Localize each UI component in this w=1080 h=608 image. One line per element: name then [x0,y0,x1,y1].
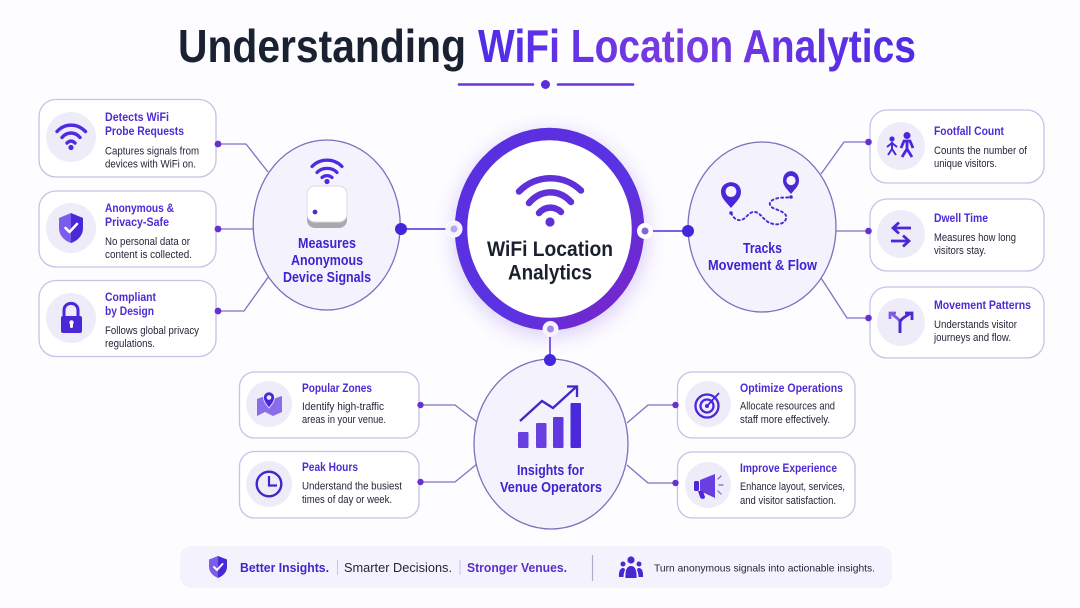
panel: right card dwell time [870,199,1044,271]
icon: route pins [721,171,799,224]
panel: left card compliant: by Design [105,306,154,318]
icon: people [887,132,913,157]
panel: right card dwell time: Measures how long [934,232,1016,244]
panel: left card anonymous: Privacy-Safe [105,217,169,229]
icon: banner shield [209,556,227,578]
panel: left card detects wifi: Probe Requests [105,126,184,138]
panel: popular zones: areas in your venue. [302,414,386,426]
panel: right card footfall: unique visitors. [934,158,997,170]
panel: popular zones: Identify high-traffic [302,401,384,413]
node: ring bottom [542,321,558,337]
panel: central hub: Analytics [508,260,592,284]
title highlight: WiFi Location Analytics [478,20,916,72]
panel: popular zones [240,372,419,438]
panel: left card detects wifi [39,100,216,177]
panel: measures anonymous device signals: Device Signals [283,270,371,286]
node: bottom hub dot [544,354,556,366]
panel: tracks movement and flow: Movement & Flow [708,258,818,274]
text: better insights: Better Insights. [240,560,329,575]
panel: measures anonymous device signals [253,140,400,310]
panel: right card movement patterns: journeys and flow. [933,332,1011,344]
node: ring left [446,221,462,237]
panel: insights for venue operators: Venue Operators [500,480,602,496]
title underline [459,80,633,89]
node: ring right [637,223,653,239]
panel: peak hours: times of day or week. [302,494,392,506]
panel: right card movement patterns [870,287,1044,358]
panel: bottom banner [180,546,892,588]
connectors: right group [645,142,868,318]
text: tagline: Turn anonymous signals into actionable insights. [654,562,875,574]
connector dots: left cards [215,141,221,314]
panel: left card anonymous: No personal data or [105,236,190,248]
connector dots: right cards [865,139,872,321]
icon: wifi router [307,160,347,228]
heading: Tracks [743,241,782,257]
text: stronger venues: Stronger Venues. [467,560,567,575]
heading: Dwell Time [934,213,988,225]
panel: improve experience: Enhance layout, services, [740,481,845,493]
panel: right card footfall [870,110,1044,183]
icon: split arrows [890,313,912,333]
node: left hub dot [395,223,407,235]
panel: improve experience: and visitor satisfaction. [740,495,836,507]
panel: peak hours: Understand the busiest [302,480,402,492]
icon: map pin [257,392,282,416]
heading: Improve Experience [740,463,837,475]
panel: right card footfall: Counts the number of [934,145,1028,157]
panel: peak hours [240,452,419,518]
panel: left card anonymous: content is collected. [105,249,192,261]
panel: tracks movement and flow [688,142,836,312]
heading: Insights for [517,463,584,479]
heading: WiFi Location [487,237,613,261]
heading: Movement Patterns [934,300,1031,312]
heading: Anonymous & [105,203,174,215]
panel: central hub [454,132,646,336]
heading: Peak Hours [302,462,358,474]
icon: wifi [519,178,581,227]
panel: left card anonymous [39,191,216,267]
panel: improve experience [678,452,855,518]
connectors: left group [218,144,455,311]
heading: Detects WiFi [105,112,169,124]
icon: clock [257,472,281,496]
panel: optimize operations: staff more effectively. [740,414,830,426]
connectors: bottom group [421,335,675,483]
panel: left card compliant [39,280,216,356]
bar chart icon [518,386,581,448]
panel: measures anonymous device signals: Anonymous [291,253,363,269]
icon: arrows [891,222,911,246]
heading: Popular Zones [302,383,372,395]
heading: Measures [298,236,356,252]
panel: insights for venue operators [474,359,628,529]
panel: right card movement patterns: Understands visitor [934,319,1017,331]
panel: right card dwell time: visitors stay. [934,245,986,257]
panel: optimize operations [678,372,855,438]
icon: wifi [57,125,86,150]
panel: left card detects wifi: Captures signals from [105,146,199,158]
icon: megaphone [694,474,723,499]
panel: left card compliant: Follows global privacy [105,325,199,337]
icon: target [696,393,719,418]
title: Understanding [178,20,466,72]
panel: left card compliant: regulations. [105,338,155,350]
icon: shield check [59,213,83,243]
text: smarter decisions: Smarter Decisions. [344,560,452,575]
connector dots: bottom cards [417,402,679,486]
heading: Compliant [105,292,156,304]
heading: Optimize Operations [740,383,843,395]
panel: optimize operations: Allocate resources and [740,400,835,412]
node: right hub dot [682,225,694,237]
icon: padlock [61,303,82,333]
heading: Footfall Count [934,126,1004,138]
icon: people group [619,556,643,578]
panel: left card detects wifi: devices with WiFi on. [105,158,196,170]
